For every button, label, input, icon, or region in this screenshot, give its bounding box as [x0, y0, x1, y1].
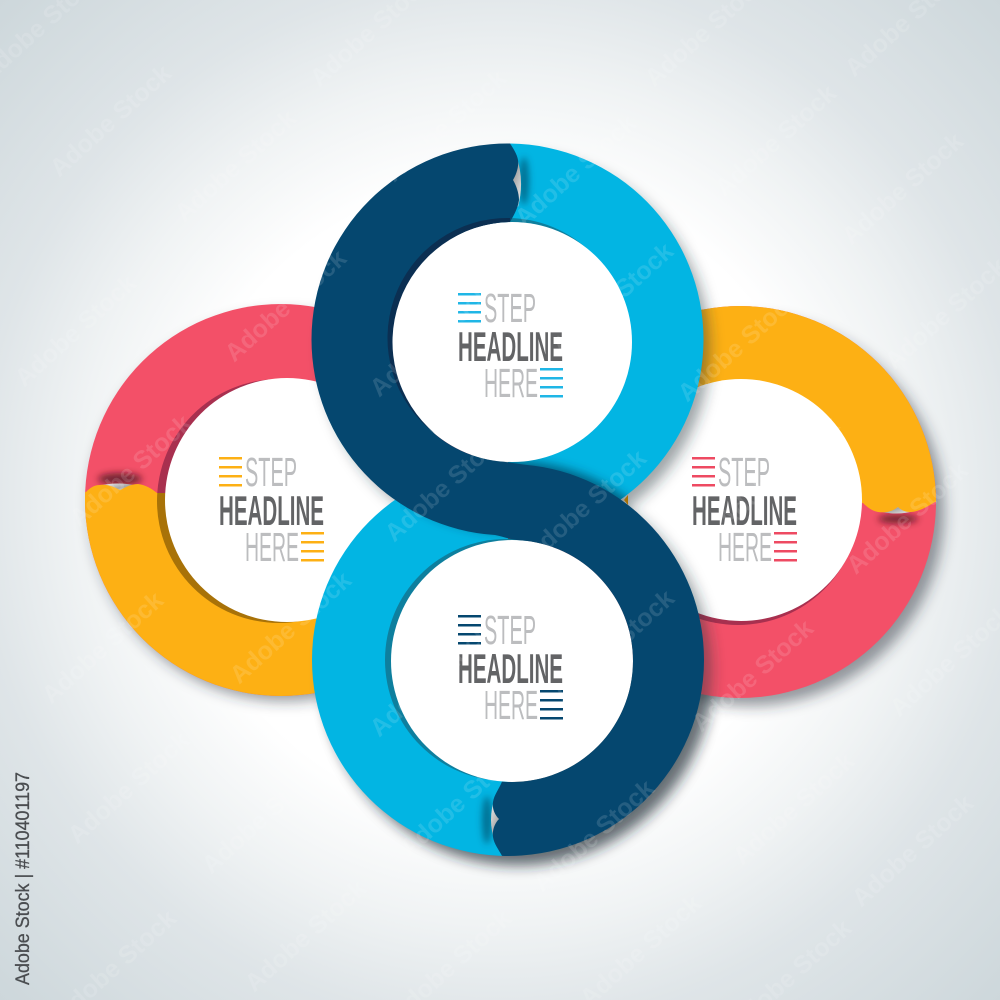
lines left: [458, 615, 481, 644]
lines left: [692, 457, 715, 486]
watermark: Adobe Stock pattern: Adobe Stock: [710, 79, 842, 202]
watermark: Adobe Stock pattern: Adobe Stock: [380, 64, 512, 187]
text block: top step: STEP: [484, 285, 536, 331]
central rings shadow on side rings: [322, 155, 712, 864]
watermark: Adobe Stock pattern: Adobe Stock: [225, 566, 357, 689]
brown inner rim: [616, 381, 860, 625]
lines right: [540, 690, 563, 720]
text block: right step: [692, 449, 797, 570]
right ring: yellow and red: [544, 306, 936, 698]
watermark: Adobe Stock pattern: Adobe Stock: [240, 874, 372, 997]
top ring: cyan segment: [508, 144, 704, 536]
shadow of navy band on cyan: [400, 457, 630, 539]
watermark: Adobe Stock pattern: Adobe Stock: [547, 237, 679, 360]
fold sheen: [878, 504, 914, 514]
crimson inner rim: [157, 379, 271, 493]
brown inner rim: [157, 493, 300, 623]
watermark: Adobe Stock pattern: Adobe Stock: [687, 614, 819, 737]
watermark: Adobe Stock pattern: Adobe Stock: [65, 409, 197, 532]
bottom seam shadow: [482, 796, 492, 844]
text: HEADLINE: [458, 645, 563, 692]
watermark: Adobe Stock pattern: Adobe Stock: [220, 244, 352, 367]
seam shadow on red: [878, 514, 918, 524]
watermark: Adobe Stock pattern: Adobe Stock: [365, 619, 497, 742]
watermark: Adobe Stock pattern: Adobe Stock: [380, 424, 512, 547]
text block: bottom step: HERE: [484, 682, 538, 728]
bottom fold sheen: [491, 797, 508, 842]
right white disc: [620, 379, 862, 621]
bottom inner rim: [385, 539, 627, 781]
watermark: Adobe Stock pattern: Adobe Stock: [520, 444, 652, 567]
red lower segment: [544, 306, 936, 698]
text: HEADLINE: [692, 487, 797, 534]
watermark: Adobe Stock pattern: Adobe Stock: [548, 584, 680, 707]
lines right: [540, 368, 563, 398]
watermark: Adobe Stock pattern: Adobe Stock: [197, 756, 329, 879]
stock id caption: Adobe Stock | #110401197: [13, 772, 34, 985]
left ring: red and yellow: [85, 304, 477, 696]
watermark: Adobe Stock pattern: Adobe Stock: [528, 774, 660, 897]
text block: left step: STEP: [245, 449, 297, 495]
outer drop shadows: [91, 313, 944, 864]
text block: bottom step: [458, 607, 563, 728]
text block: top step: [458, 285, 563, 406]
fold sheen: [98, 484, 138, 493]
watermark: Adobe Stock pattern: Adobe Stock: [45, 59, 177, 182]
lines left: [458, 293, 481, 322]
text block: right step: STEP: [718, 449, 770, 495]
watermark: Adobe Stock pattern: Adobe Stock: [673, 284, 805, 407]
text block: top step: HERE: [484, 360, 538, 406]
lines left: [219, 457, 242, 486]
watermark: Adobe Stock pattern: Adobe Stock: [510, 109, 642, 232]
watermark: Adobe Stock pattern: Adobe Stock: [37, 586, 169, 709]
bottom white disc: [391, 540, 633, 782]
text block: left step: [219, 449, 324, 570]
top white disc: [392, 222, 632, 462]
red upper segment: [85, 304, 477, 696]
top inner rim: [387, 218, 627, 458]
watermark: Adobe Stock pattern: Adobe Stock: [170, 104, 302, 227]
watermark: Adobe Stock pattern: Adobe Stock: [841, 457, 974, 580]
lines right: [774, 532, 797, 562]
text block: right step: HERE: [718, 524, 772, 570]
watermark: Adobe Stock pattern: Adobe Stock: [10, 269, 142, 392]
top fold sheen: [505, 155, 521, 207]
navy S band: [311, 143, 704, 856]
dark navy inner rim: [387, 218, 510, 434]
top seam shadow: [519, 157, 529, 205]
bottom ring: cyan segment: [312, 464, 508, 856]
watermark: Adobe Stock pattern: Adobe Stock: [847, 789, 979, 912]
crimson inner rim: [698, 561, 846, 625]
watermark: Adobe Stock pattern: Adobe Stock: [63, 726, 195, 849]
yellow upper segment: [698, 306, 936, 512]
lines right: [301, 532, 324, 562]
text: HEADLINE: [458, 323, 563, 370]
seam shadow on red: [98, 473, 142, 485]
watermark: Adobe Stock pattern: Adobe Stock: [365, 279, 497, 402]
watermark: Adobe Stock pattern: Adobe Stock: [395, 739, 527, 862]
brown sliver at crossing: [624, 495, 628, 505]
watermark: Adobe Stock pattern: Adobe Stock: [837, 127, 969, 250]
watermark: Adobe Stock pattern: Adobe Stock: [713, 411, 845, 534]
watermark: Adobe Stock pattern: Adobe Stock: [728, 747, 860, 870]
text: HEADLINE: [219, 487, 324, 534]
left white disc: [165, 378, 409, 622]
text block: left step: HERE: [245, 524, 299, 570]
yellow lower segment: [85, 484, 316, 696]
text block: bottom step: STEP: [484, 607, 536, 653]
